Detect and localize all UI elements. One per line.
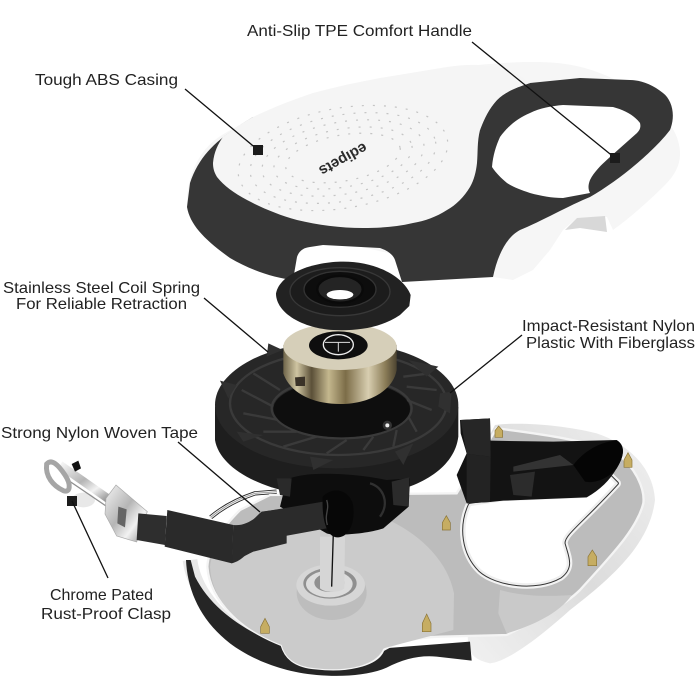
callout line: casing bbox=[185, 89, 258, 150]
nylon reel bbox=[215, 342, 458, 498]
spring ring bbox=[323, 335, 353, 355]
spring top face bbox=[283, 323, 397, 370]
chrome clasp bbox=[46, 461, 287, 563]
label: clasp: Rust-Proof Clasp bbox=[41, 606, 171, 623]
clasp soft shadow bbox=[72, 493, 95, 507]
tray left white rim bbox=[190, 560, 282, 652]
callout line: coil spring bbox=[204, 298, 268, 352]
screw posts bbox=[261, 426, 632, 633]
tray light outer shell bbox=[457, 424, 655, 663]
label: coil spring bbox=[3, 280, 200, 313]
label: handle: Anti-Slip TPE Comfort Handle bbox=[247, 23, 472, 40]
handle opening bbox=[492, 105, 640, 198]
buckle body bbox=[280, 474, 410, 535]
clasp rod bbox=[60, 465, 110, 500]
clasp bolt bbox=[72, 461, 81, 472]
buckle right block bbox=[392, 477, 409, 507]
knot highlight bbox=[326, 500, 328, 525]
callout line: tape bbox=[178, 442, 260, 512]
label: nylon plastic bbox=[522, 318, 695, 352]
tape continuation bbox=[232, 508, 287, 563]
spool cap disc bbox=[276, 262, 411, 330]
brand logo: edipets bbox=[316, 139, 370, 179]
cartridge housing bbox=[457, 418, 623, 503]
label: casing: Tough ABS Casing bbox=[35, 72, 178, 89]
casing white shell bbox=[187, 62, 680, 280]
marker: clasp bbox=[67, 496, 77, 506]
callout line: clasp bbox=[72, 501, 108, 578]
reel pin bbox=[383, 421, 392, 430]
cap collar bbox=[317, 276, 363, 303]
buckle gloss bbox=[370, 483, 385, 517]
clasp collar bbox=[105, 485, 147, 542]
label: coil spring: For Reliable Retraction bbox=[16, 296, 187, 313]
top casing bbox=[187, 62, 680, 282]
casing white top oval bbox=[213, 65, 530, 228]
steel coil spring bbox=[283, 323, 397, 404]
reel top plate bbox=[215, 342, 458, 468]
tray dark outer shell bbox=[186, 560, 472, 676]
marker: casing bbox=[253, 145, 263, 155]
side notch bbox=[565, 216, 607, 232]
spring centre bbox=[309, 331, 368, 359]
reel body bbox=[215, 407, 458, 498]
woven tape end bbox=[137, 513, 167, 545]
buckle left block bbox=[277, 478, 292, 497]
tape sleeve bbox=[165, 510, 233, 563]
label: clasp bbox=[41, 587, 171, 623]
clasp hook ring bbox=[46, 462, 69, 491]
clasp collar slot bbox=[117, 507, 127, 527]
cap base bbox=[276, 262, 411, 330]
central hub and shaft bbox=[296, 533, 367, 620]
marker: handle bbox=[610, 153, 620, 163]
handle opening bbox=[464, 477, 617, 584]
reel inner cavity bbox=[273, 381, 410, 437]
handle-side floor highlight bbox=[498, 590, 572, 633]
woven tape bbox=[232, 502, 327, 563]
tray upper-left rim bbox=[211, 492, 277, 517]
ventilation dot texture bbox=[230, 90, 456, 226]
cap inner ring bbox=[304, 271, 376, 307]
disc floor bbox=[210, 510, 454, 669]
tape and buckle bbox=[232, 474, 410, 563]
label: clasp: Chrome Pated bbox=[50, 587, 153, 604]
callout line: handle bbox=[472, 42, 615, 158]
label: coil spring: Stainless Steel Coil Spring bbox=[3, 280, 200, 297]
casing dark band and handle bbox=[187, 78, 673, 282]
tape knot bbox=[323, 491, 354, 537]
label: nylon plastic: Impact-Resistant Nylon bbox=[522, 318, 695, 335]
cap ring bbox=[290, 268, 390, 316]
callout line: nylon plastic bbox=[450, 335, 522, 393]
label: nylon plastic: Plastic With Fiberglass bbox=[526, 335, 695, 352]
reel pin hole bbox=[385, 423, 389, 427]
bottom tray housing bbox=[186, 418, 655, 676]
cap hole bbox=[327, 290, 353, 299]
reel lugs bbox=[220, 343, 452, 470]
spring ring mark bbox=[325, 342, 350, 352]
label: tape: Strong Nylon Woven Tape bbox=[1, 425, 198, 442]
tray grey interior floor bbox=[207, 428, 644, 669]
reel ribs bbox=[230, 352, 447, 455]
spring side wall bbox=[283, 345, 397, 404]
spring clips bbox=[295, 377, 305, 386]
clasp rod edge bbox=[56, 472, 106, 506]
